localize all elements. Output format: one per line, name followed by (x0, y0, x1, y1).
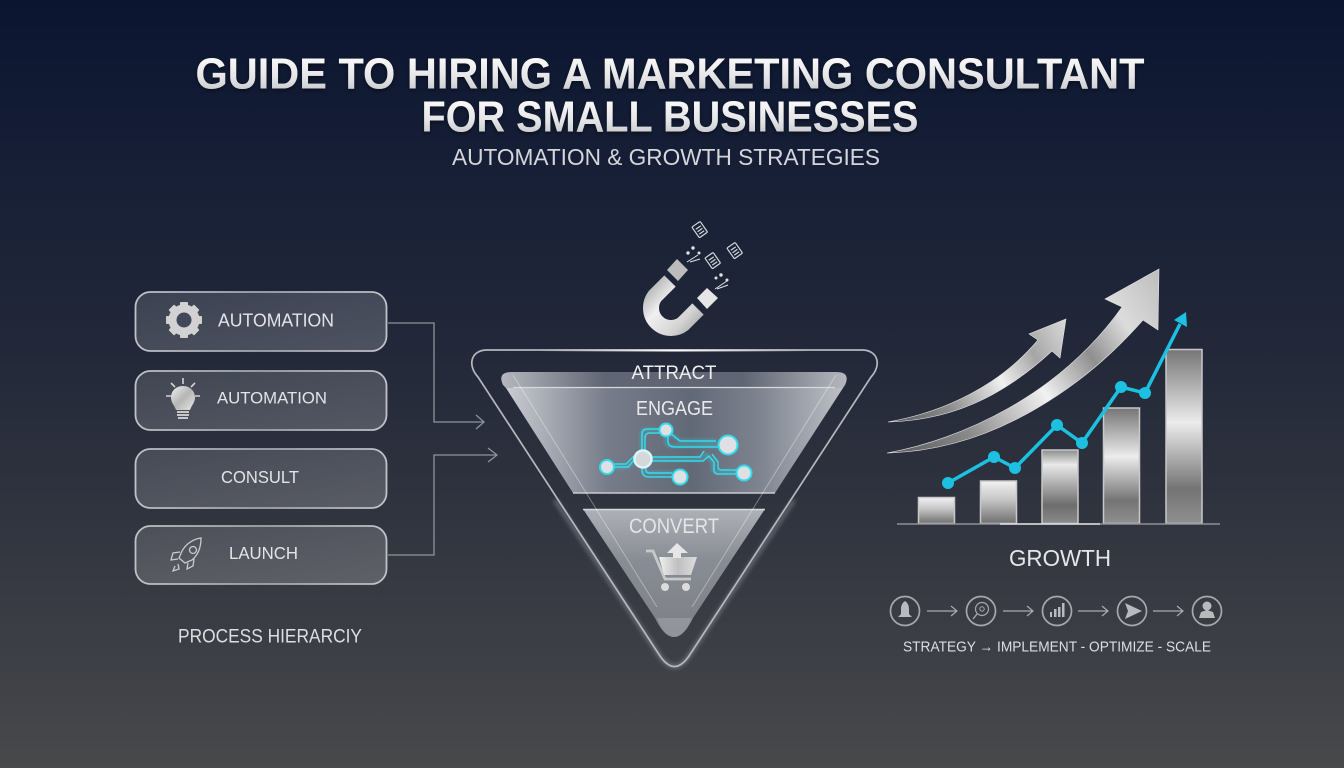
connector: top boxes to funnel (388, 323, 484, 429)
subtitle: AUTOMATION & GROWTH STRATEGIES (452, 144, 880, 170)
process step: automation with bulb (136, 371, 386, 430)
funnel tier: engage: ENGAGE (636, 398, 713, 420)
panel: growth chart (887, 269, 1222, 656)
magnet poles (667, 259, 688, 281)
step icon: rocket (890, 596, 920, 626)
title: GUIDE TO HIRING A MARKETING CONSULTANT (196, 50, 1145, 98)
caption: process hierarchy: PROCESS HIERARCIY (178, 626, 362, 648)
icon: gear (166, 302, 202, 338)
funnel tier: engage (506, 388, 843, 493)
step icon: play arrow (1118, 596, 1146, 626)
connector: bottom boxes to funnel (388, 448, 497, 555)
step flow icons (890, 596, 1222, 626)
funnel tier: convert (583, 509, 765, 637)
step icon: bars (1042, 596, 1072, 626)
chart: silver swoosh arrows (887, 269, 1159, 453)
arrow (1078, 606, 1108, 616)
step icon: person (1192, 596, 1222, 626)
process step: consult: CONSULT (221, 467, 299, 487)
circuit network (600, 424, 752, 484)
glass reflections (513, 375, 836, 607)
title: FOR SMALL BUSINESSES (422, 94, 918, 142)
arrow (1153, 606, 1183, 616)
icon: magnet attracting documents (651, 221, 743, 328)
panel: process hierarchy (136, 292, 497, 648)
heading: growth: GROWTH (1009, 545, 1111, 571)
funnel tier: convert: CONVERT (629, 515, 719, 538)
funnel tier: attract (501, 363, 847, 388)
funnel outer outline (472, 350, 877, 666)
process step: automation with gear: AUTOMATION (218, 310, 334, 330)
icon: shopping cart with arrow (646, 543, 697, 591)
magnet body (651, 281, 698, 328)
small arrow (888, 319, 1066, 422)
process step: launch with rocket: LAUNCH (229, 543, 298, 563)
process step: automation with gear (136, 292, 386, 351)
icon: rocket (171, 538, 201, 571)
funnel tier: attract: ATTRACT (632, 363, 717, 384)
floating documents (692, 221, 743, 269)
arrow (927, 606, 957, 616)
icon: light bulb (166, 378, 200, 419)
trend line with arrow (942, 312, 1187, 489)
step icon: magnifier target (966, 596, 996, 626)
sparks (687, 247, 728, 289)
bar chart (918, 350, 1202, 524)
caption: strategy flow: STRATEGY → IMPLEMENT - OPTIMIZE - SCALE (903, 638, 1211, 656)
process step: launch with rocket (136, 526, 386, 584)
process step: automation with bulb: AUTOMATION (217, 388, 327, 408)
large arrow (887, 269, 1159, 453)
arrow (1003, 606, 1033, 616)
process step: consult (136, 449, 386, 508)
chart baseline (897, 523, 1220, 525)
panel: marketing funnel (472, 221, 877, 666)
title (196, 50, 1145, 142)
